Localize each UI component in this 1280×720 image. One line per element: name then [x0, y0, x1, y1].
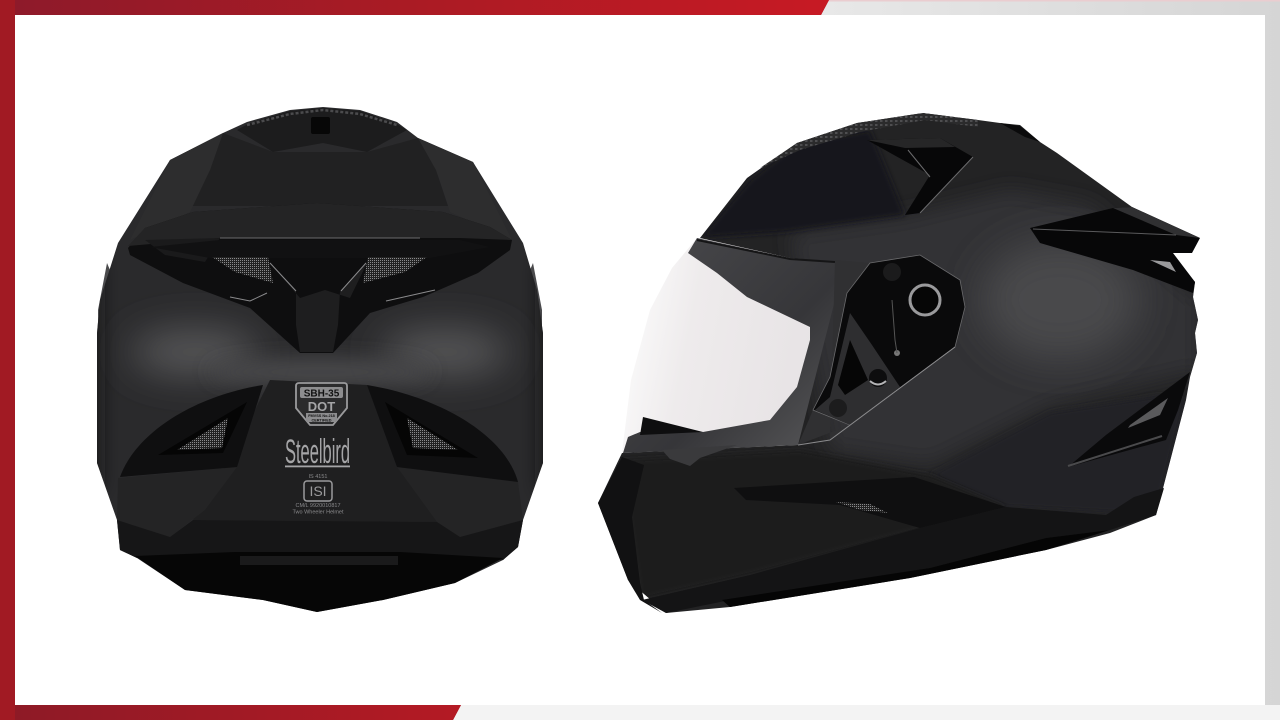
rear badge: SBH-35 DOT — [296, 383, 347, 425]
frame: red top band, left edge and bottom band — [0, 0, 829, 720]
rear ISI mark: ISI — [309, 483, 327, 499]
helmet side view — [598, 113, 1200, 613]
rear spoiler mesh left — [212, 257, 273, 283]
frame: grey top right band and right edge — [453, 0, 1280, 720]
side cheek area — [798, 260, 870, 445]
rear spoiler — [128, 203, 512, 353]
rear ISI mark — [292, 474, 344, 516]
side lower opening — [722, 530, 1110, 607]
rear spoiler mesh right — [363, 257, 427, 283]
rear badge: SBH-35 DOT: DOT — [308, 399, 335, 414]
side clear window dark piece — [640, 417, 703, 435]
side rear spoiler — [1030, 207, 1200, 293]
rear visor edge strips — [98, 263, 542, 372]
rear neck opening — [135, 552, 503, 612]
side visor gasket — [623, 238, 835, 453]
rear lower left vent — [120, 385, 263, 477]
rear shell — [97, 107, 543, 612]
side top mesh — [760, 113, 978, 168]
side rear lower vent — [1068, 372, 1190, 467]
helmet rear view: Steelbird — [285, 433, 350, 471]
side shell shading — [620, 130, 1200, 600]
rear badge: SBH-35 DOT: FMVSS No.218 — [308, 414, 335, 418]
rear badge: SBH-35 DOT: SBH-35 — [304, 388, 340, 400]
rear top vent with mesh — [237, 108, 407, 152]
side top fin — [1000, 123, 1040, 142]
rear bottom band — [117, 520, 523, 560]
rear logo: Steelbird — [285, 433, 350, 471]
side lower trim strip — [642, 488, 1164, 613]
rear lower centre panel — [193, 380, 437, 522]
rear shell shading — [70, 260, 570, 490]
side visor pivot mechanism — [813, 255, 965, 425]
rear spoiler centre fin — [270, 263, 367, 352]
side shell — [598, 113, 1198, 613]
rear badge: SBH-35 DOT: CERTIFIED — [311, 418, 332, 422]
side chin vent — [734, 477, 1006, 528]
side lower visor seal line — [798, 347, 955, 445]
rear upper dome facets — [190, 133, 450, 206]
side chin visor tab — [662, 445, 737, 466]
side upper visor seal line — [697, 240, 835, 262]
rear ISI mark: IS 4151 — [309, 474, 327, 480]
rear lower right vent — [367, 385, 518, 482]
side chin guard — [598, 457, 662, 613]
side top scoop — [867, 138, 973, 215]
side clear visor — [622, 238, 835, 453]
rear lower side panels — [117, 467, 523, 537]
rear ISI mark: Two Wheeler Helmet — [292, 510, 344, 516]
helmet rear view — [97, 107, 543, 612]
rear ISI mark: CM/L 9920010817 — [295, 503, 341, 509]
